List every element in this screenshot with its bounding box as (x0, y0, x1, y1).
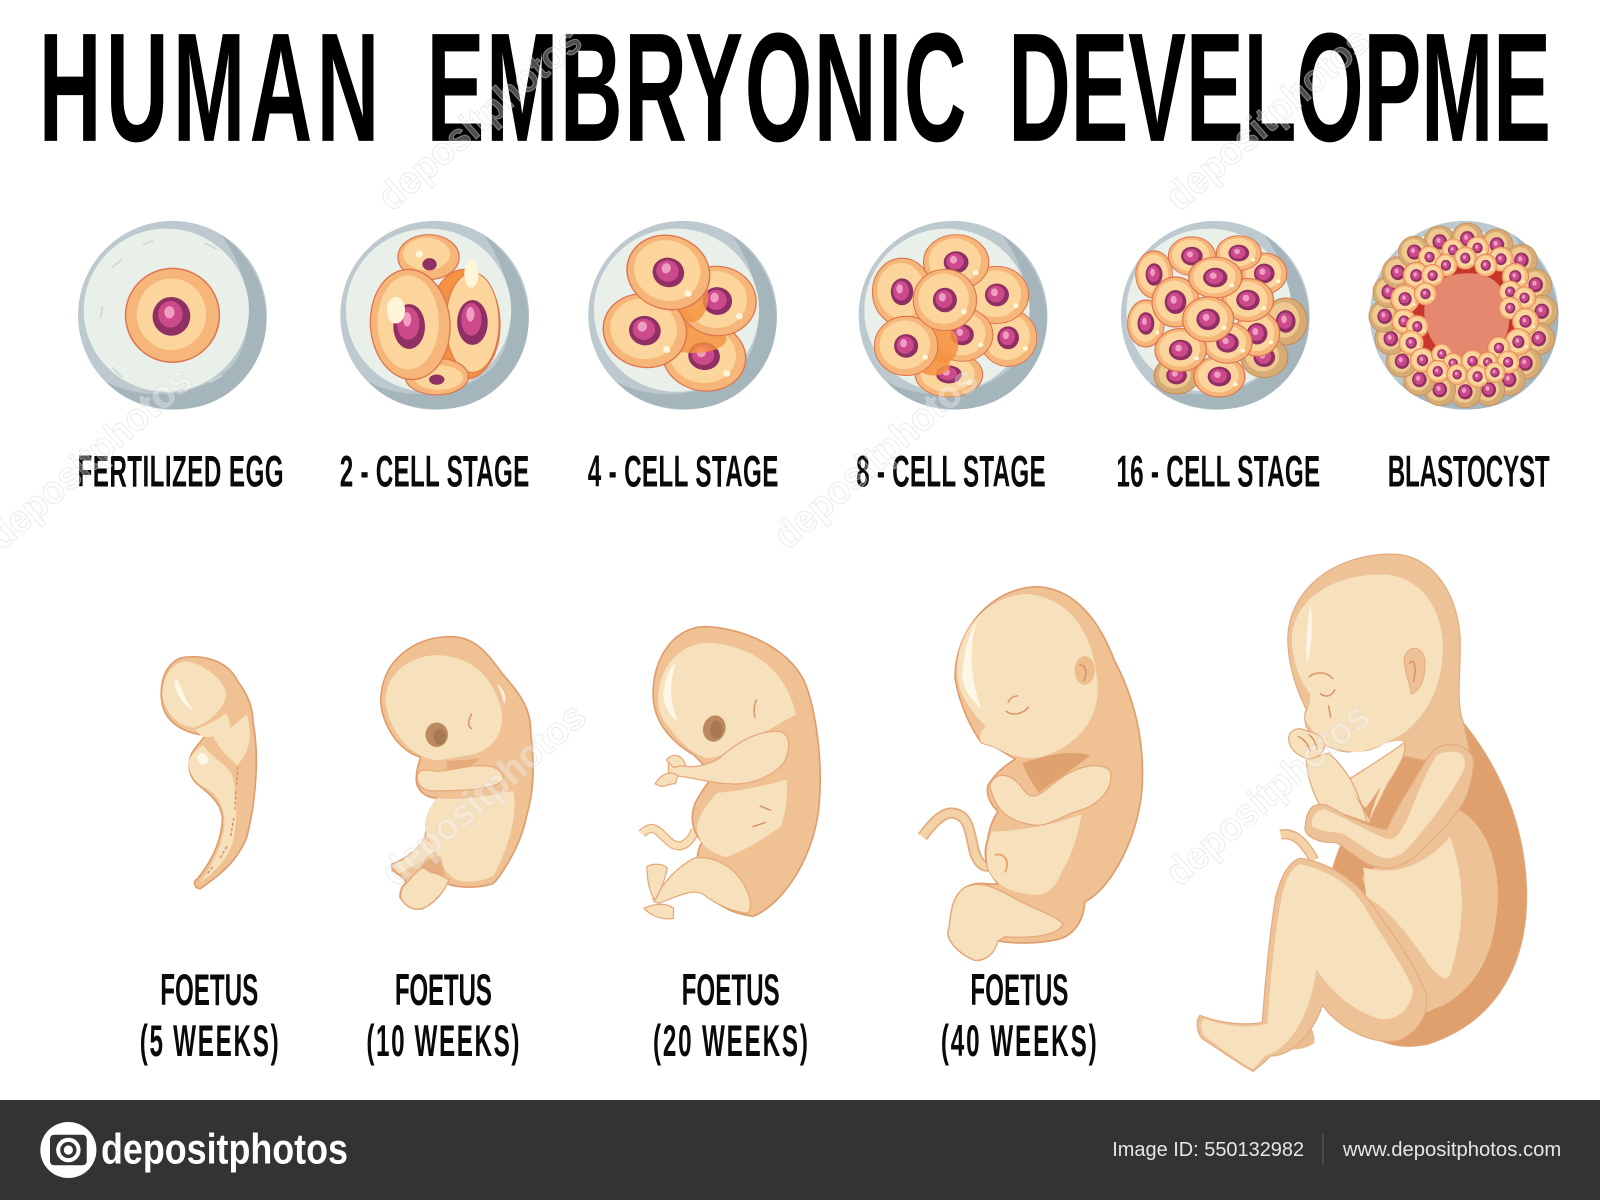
illustration: foetus 20 weeks (642, 627, 820, 919)
label: foetus 10 weeks: FOETUS (395, 964, 492, 1015)
title: DEVELOPME (1008, 0, 1551, 174)
label: foetus 20 weeks (653, 964, 808, 1066)
website: www.depositphotos.com (1342, 1139, 1561, 1161)
watermarks: depositphotos (374, 695, 594, 895)
label: foetus 20 weeks: (20 WEEKS) (653, 1015, 808, 1066)
label: fertilized egg: FERTILIZED EGG (78, 446, 284, 497)
label: foetus 5 weeks (140, 964, 279, 1066)
icon: 8-cell stage (859, 221, 1047, 410)
illustration: foetus 10 weeks (381, 637, 533, 909)
icon: fertilized egg (78, 221, 267, 410)
illustration: foetus 5 weeks (161, 657, 256, 889)
watermarks: depositphotos (765, 358, 986, 558)
hand near mouth (1289, 729, 1324, 759)
footer logo icon (40, 1122, 96, 1178)
head (1288, 554, 1469, 760)
title (39, 0, 1551, 174)
watermarks: depositphotos (1157, 695, 1378, 895)
watermarks (0, 19, 1378, 895)
label: 8-cell stage: 8 - CELL STAGE (856, 446, 1046, 497)
icon: 4-cell stage (588, 221, 777, 410)
watermarks: depositphotos (1157, 19, 1378, 219)
label: foetus 10 weeks: (10 WEEKS) (366, 1015, 520, 1066)
label: foetus 10 weeks (366, 964, 520, 1066)
near leg (1197, 858, 1427, 1071)
illustration: full-term baby (1197, 554, 1527, 1071)
label: 4-cell stage: 4 - CELL STAGE (588, 446, 778, 497)
umbilical cord (1281, 834, 1314, 860)
white gap under chin (1330, 741, 1404, 779)
image id: Image ID: 550132982 (1112, 1139, 1304, 1161)
far arm (1306, 743, 1405, 822)
footer bar (0, 1100, 1600, 1200)
icon: blastocyst (1369, 221, 1559, 410)
title: HUMAN (39, 0, 379, 174)
label: foetus 40 weeks (941, 964, 1097, 1066)
label: 2-cell stage: 2 - CELL STAGE (340, 446, 529, 497)
label: foetus 5 weeks: FOETUS (160, 964, 258, 1015)
label: foetus 20 weeks: FOETUS (682, 964, 780, 1015)
watermarks: depositphotos (370, 19, 590, 219)
far foot (1276, 1000, 1314, 1049)
label: 16-cell stage: 16 - CELL STAGE (1116, 446, 1320, 497)
label: foetus 40 weeks: FOETUS (970, 964, 1068, 1015)
icon: 2-cell stage (340, 221, 529, 410)
illustration: foetus 40 weeks (922, 587, 1143, 960)
label: foetus 5 weeks: (5 WEEKS) (140, 1015, 279, 1066)
label: foetus 40 weeks: (40 WEEKS) (941, 1015, 1097, 1066)
icon: 16-cell stage (1121, 221, 1310, 410)
footer logo wordmark: depositphotos (101, 1125, 348, 1173)
label: blastocyst: BLASTOCYST (1388, 446, 1550, 497)
near arm (1305, 745, 1474, 868)
title: EMBRYONIC (427, 0, 967, 174)
